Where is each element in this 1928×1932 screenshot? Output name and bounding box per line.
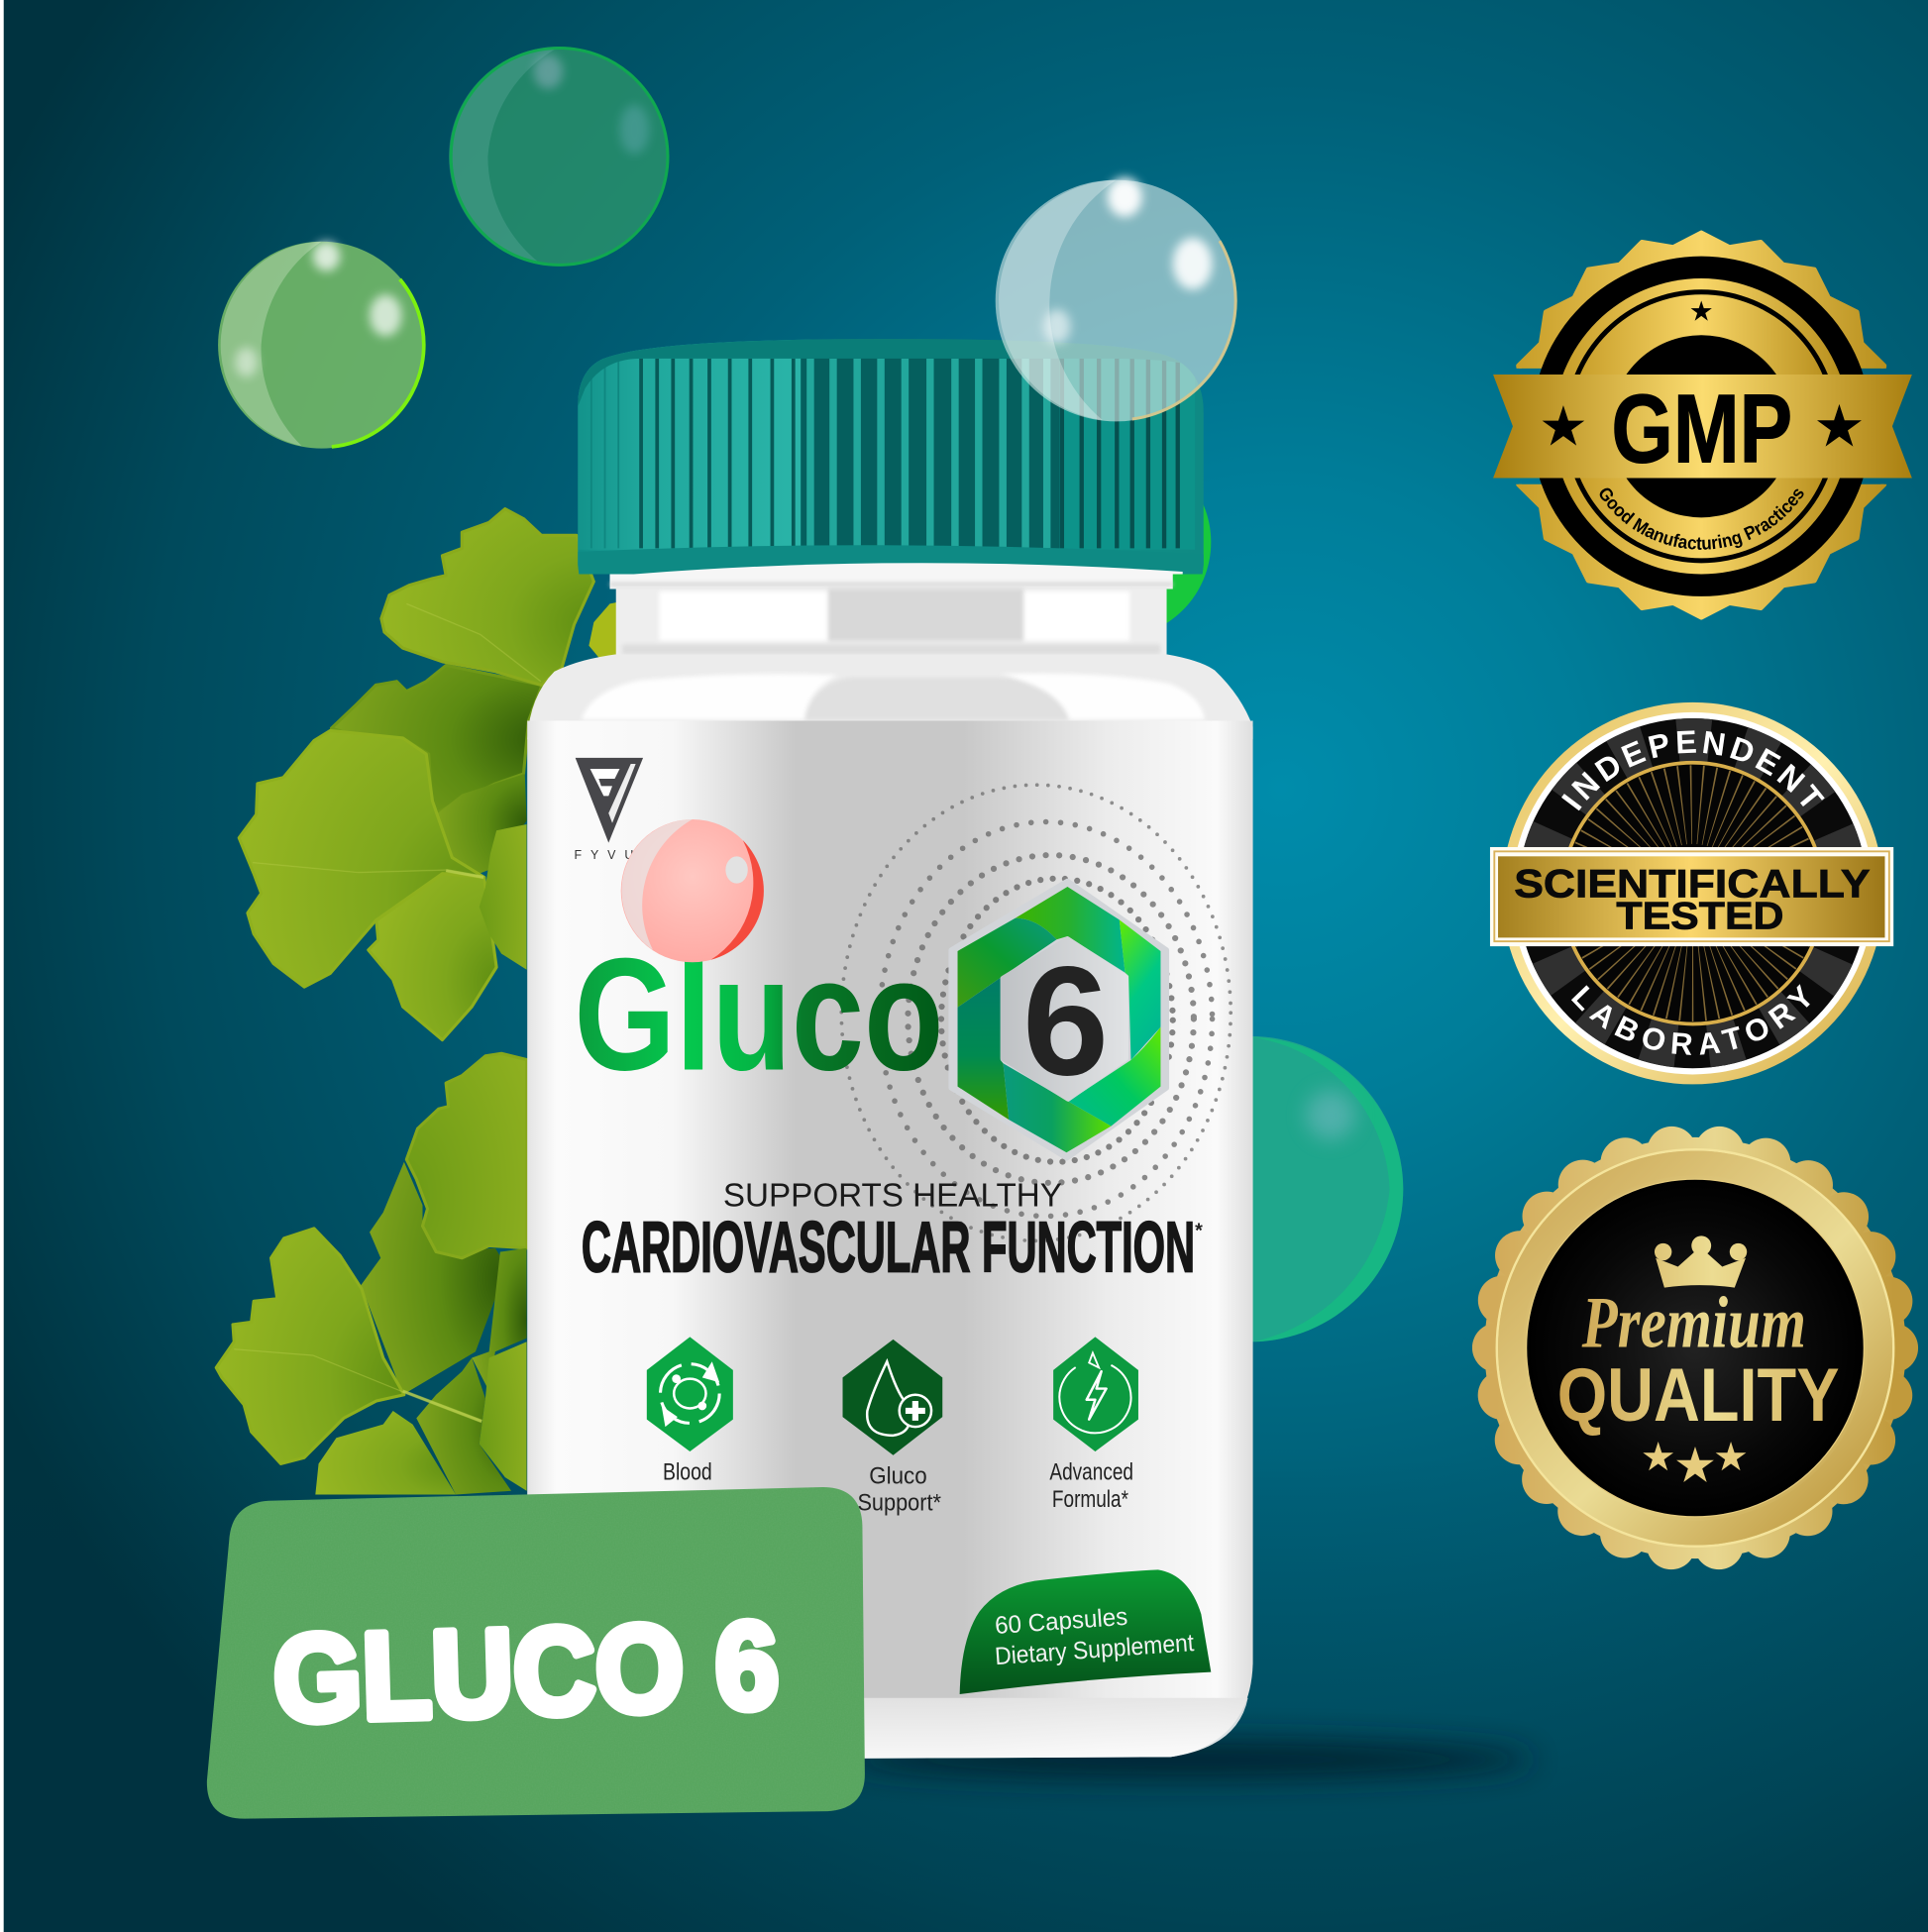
badge: 60 capsules: 60 Capsules xyxy=(994,1603,1128,1640)
stars xyxy=(1643,1442,1746,1482)
gold ring xyxy=(1497,1149,1893,1547)
text: quality: QUALITY xyxy=(1557,1353,1839,1438)
banner xyxy=(1490,847,1893,946)
bubble: pink on label xyxy=(621,819,764,962)
cap ribs left xyxy=(578,359,801,550)
label: gluco support xyxy=(857,1463,941,1517)
heading: cardiovascular function: CARDIOVASCULAR FUNCTION xyxy=(582,1208,1195,1287)
seal: premium quality xyxy=(1484,1137,1906,1558)
bottle shoulder xyxy=(527,654,1253,739)
bottle neck xyxy=(610,563,1173,657)
brand logo: FYVUS xyxy=(574,758,651,862)
bottle xyxy=(527,563,1253,1760)
leaf stems xyxy=(234,603,541,1422)
seal: GMP xyxy=(1493,230,1912,620)
seal rings xyxy=(1532,257,1872,596)
leaf: bottom back xyxy=(416,1357,511,1495)
leaf: lower top xyxy=(406,1053,527,1258)
gold inner ring xyxy=(1562,763,1823,1023)
bottom reflection xyxy=(527,1698,1248,1760)
asterisk: * xyxy=(1195,1221,1203,1242)
product card: GLUCO 6 xyxy=(207,1487,865,1819)
icon: blood hexagon xyxy=(647,1337,733,1451)
leaf: lower large xyxy=(216,1229,404,1463)
ginkgo leaves xyxy=(216,509,622,1495)
label: advanced formula: Advanced xyxy=(1049,1460,1133,1486)
seal star top xyxy=(1691,300,1712,321)
bubble: teal-green top xyxy=(449,47,669,267)
label: gluco support: Gluco xyxy=(869,1463,927,1489)
black disc xyxy=(1527,1179,1864,1517)
leaf: tiny behind neck xyxy=(589,601,622,661)
cap top rim xyxy=(579,339,1180,405)
brand logo: FYVUS: FYVUS xyxy=(574,848,651,862)
text: premium: Premium xyxy=(1581,1282,1806,1363)
seal scalloped edge xyxy=(1509,233,1893,617)
scalloped edge xyxy=(1484,1137,1906,1558)
bottle body xyxy=(527,721,1253,1760)
sunburst rays xyxy=(1604,805,1781,982)
ribbon star left xyxy=(1543,405,1584,446)
curved text: independent: INDEPENDENT xyxy=(1561,730,1825,810)
curved text: laboratory: LABORATORY xyxy=(1571,984,1810,1055)
seal: scientifically tested: TESTED xyxy=(1616,896,1784,938)
leaf: middle right xyxy=(480,824,527,970)
dial band xyxy=(1540,740,1846,1046)
ribbon xyxy=(1493,375,1912,479)
leaf: bottom small xyxy=(315,1411,456,1495)
leaf: lower back xyxy=(361,1162,501,1395)
banner text: SCIENTIFICALLY xyxy=(1514,862,1871,906)
icon: hexagon 6: 6 xyxy=(1022,934,1109,1108)
ribbon star right xyxy=(1817,404,1862,447)
seal curved text: Good Manufacturing Practices xyxy=(1599,487,1803,550)
dotted concentric rings xyxy=(841,785,1231,1240)
leaf: middle large xyxy=(239,730,484,987)
leaf: top back xyxy=(331,666,542,814)
icon: advanced bolt hexagon xyxy=(1046,1337,1144,1451)
bubble: green top left xyxy=(177,201,466,489)
leaf: middle lower xyxy=(369,874,496,1040)
leaf: top xyxy=(381,509,593,685)
cap lower rim xyxy=(573,545,1208,580)
label: advanced formula: Formula* xyxy=(1052,1487,1128,1513)
icon: hexagon 6 xyxy=(951,881,1167,1158)
bubble: teal behind bottle xyxy=(1098,1036,1403,1342)
label: gluco support: Support* xyxy=(857,1491,941,1517)
bottle cap xyxy=(573,333,1208,580)
badge: 60 capsules xyxy=(960,1569,1211,1694)
seal: scientifically tested xyxy=(1490,701,1894,1084)
crown xyxy=(1655,1235,1747,1288)
cap ribs center xyxy=(801,358,1059,550)
bubble: pale over cap xyxy=(953,138,1279,464)
product name: Gluco: Gluco xyxy=(574,925,943,1104)
badge: 60 capsules: Dietary Supplement xyxy=(994,1629,1195,1670)
ribbon text: GMP: GMP xyxy=(1611,374,1792,483)
cap ribs right xyxy=(1059,359,1195,550)
bubble: bright green sliver behind cap xyxy=(1018,446,1211,638)
icon: gluco drop hexagon xyxy=(843,1340,942,1455)
leaf: lower right upper xyxy=(472,1248,527,1391)
label: advanced formula xyxy=(1049,1460,1133,1513)
floor shadow under bottle xyxy=(844,1740,1534,1779)
leaf: lower right front xyxy=(480,1342,527,1491)
leaf: middle dark back xyxy=(436,774,527,874)
tagline: supports healthy: SUPPORTS HEALTHY xyxy=(723,1178,1062,1215)
product card: GLUCO 6: GLUCO 6 xyxy=(271,1596,781,1748)
label: blood: Blood xyxy=(663,1460,712,1486)
